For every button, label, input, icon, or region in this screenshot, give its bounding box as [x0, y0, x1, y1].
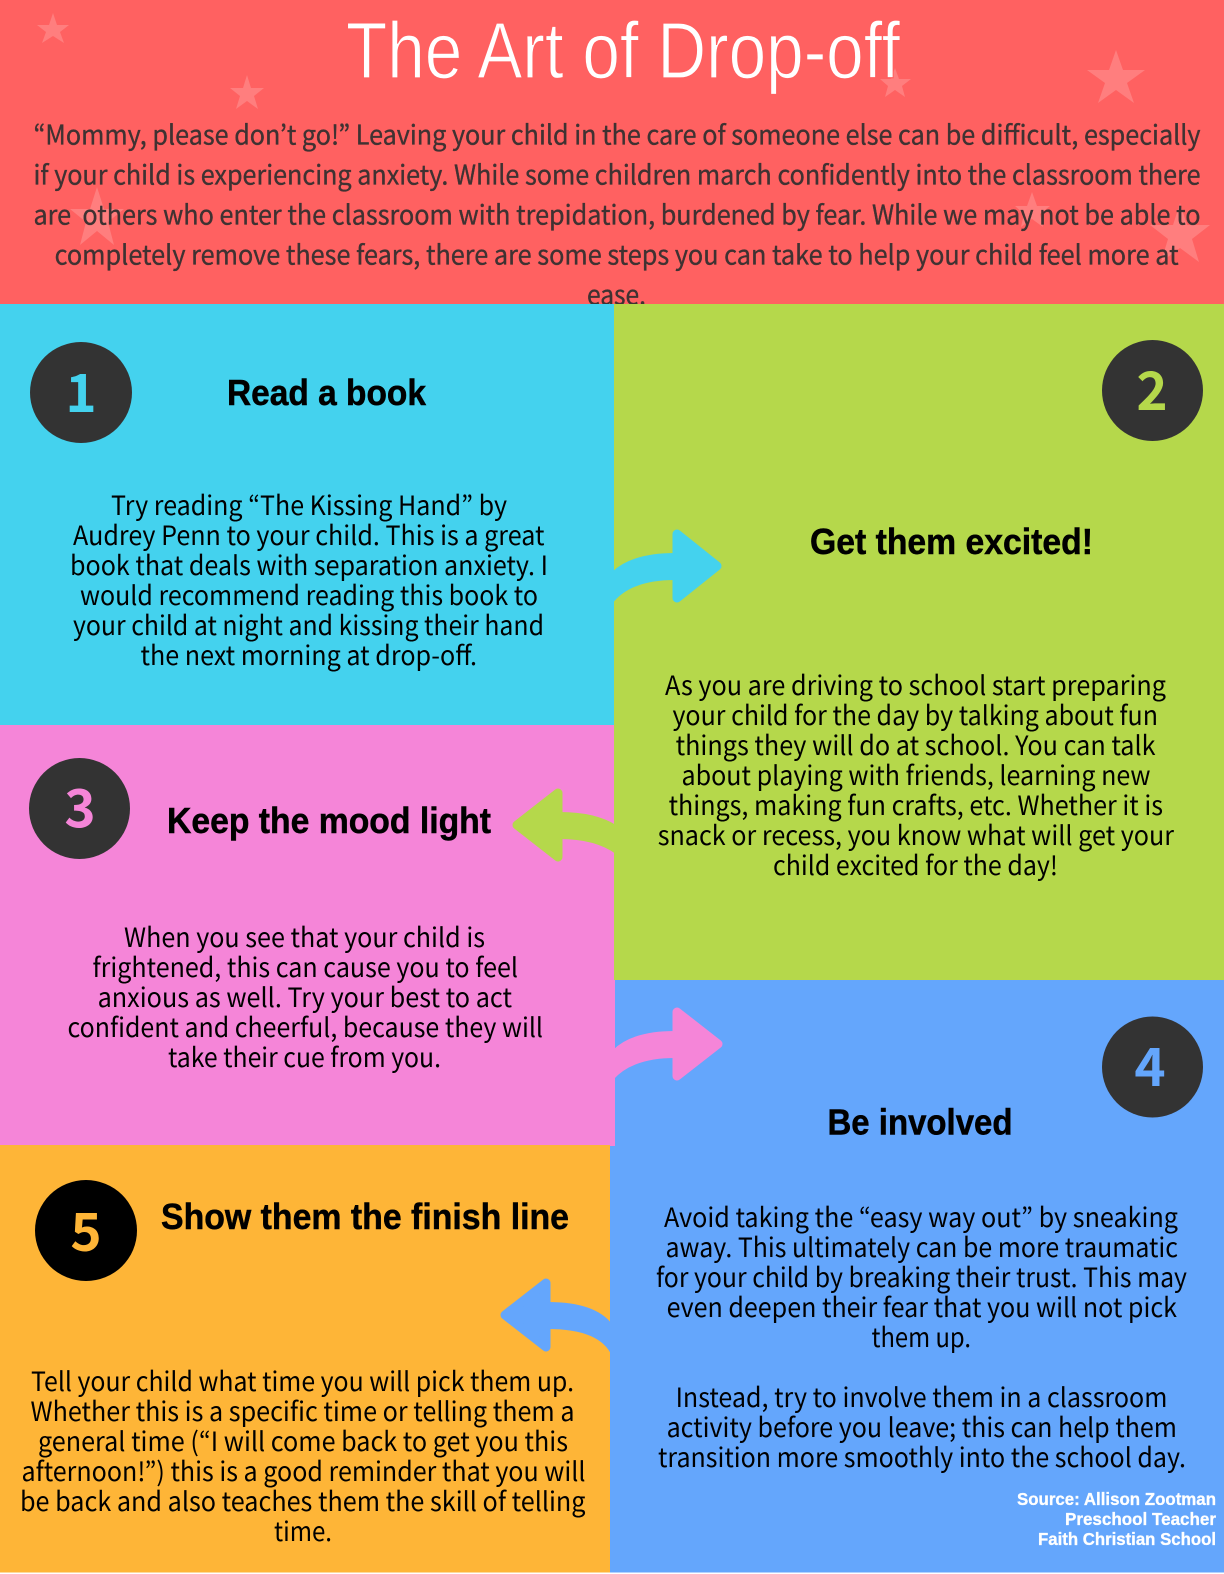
arrow: step 2 to step 3 [517, 793, 616, 857]
body 2 [658, 664, 1175, 883]
body 1: Try reading “The Kissing Hand” by [111, 484, 507, 523]
badge 5 [35, 1180, 137, 1281]
title: The Art of Drop-off [346, 6, 901, 95]
body 4: for your child by breaking their trust. This may [656, 1256, 1187, 1295]
heading 4: Be involved [828, 1102, 1012, 1142]
heading 1: Read a book [227, 372, 427, 413]
body 3: anxious as well. Try your best to act [98, 976, 512, 1015]
panel: step 3 keep the mood light [0, 725, 615, 1146]
body 1: your child at night and kissing their hand [73, 604, 544, 643]
body 2: child excited for the day! [773, 844, 1058, 883]
panel: header [0, 0, 1224, 312]
body 4: away. This ultimately can be more traumatic [666, 1226, 1178, 1265]
body 4: activity before you leave; this can help them [667, 1406, 1177, 1445]
badge 1 [30, 342, 132, 443]
body 5: be back and also teaches them the skill of telling [20, 1480, 586, 1519]
panel: step 4 be involved [610, 980, 1224, 1572]
panel: step 1 read a book [0, 304, 614, 725]
badge 2: 2 [1136, 350, 1168, 426]
body 5: Tell your child what time you will pick them up. [31, 1360, 574, 1399]
source credit [1017, 1489, 1216, 1549]
body 4: Instead, try to involve them in a classroom [676, 1376, 1167, 1415]
body 5: time. [274, 1510, 332, 1549]
body 2: things, making fun crafts, etc. Whether it is [669, 784, 1163, 823]
decorative stars [37, 13, 1210, 262]
body 1 [70, 484, 548, 673]
body 3 [68, 916, 543, 1075]
badge 1: 1 [65, 352, 97, 428]
heading 2: Get them excited! [810, 521, 1093, 562]
body 2: snack or recess, you know what will get your [658, 814, 1175, 853]
badge 5: 5 [70, 1191, 102, 1267]
body 5 [20, 1360, 586, 1549]
body 1: Audrey Penn to your child. This is a great [73, 514, 544, 553]
intro text: ease. [587, 274, 646, 312]
body 1: the next morning at drop-off. [140, 634, 477, 673]
body 2: things they will do at school. You can talk [676, 724, 1156, 763]
body 5: general time (“I will come back to get you this [38, 1420, 568, 1459]
heading 5: Show them the finish line [161, 1196, 569, 1237]
source credit: Source: Allison Zootman [1017, 1489, 1216, 1509]
intro text [34, 114, 1200, 312]
heading 3: Keep the mood light [167, 800, 491, 841]
body 4: transition more smoothly into the school day. [658, 1436, 1186, 1475]
body 3: When you see that your child is [124, 916, 485, 955]
arrow: step 4 to step 5 [505, 1283, 612, 1356]
badge 4: 4 [1134, 1026, 1166, 1102]
body 5: Whether this is a specific time or telling them a [30, 1390, 574, 1429]
body 2: your child for the day by talking about fun [672, 694, 1158, 733]
badge 3: 3 [64, 768, 96, 844]
badge 2 [1102, 340, 1203, 441]
panel: step 2 get them excited [614, 304, 1224, 980]
body 1: would recommend reading this book to [80, 574, 538, 613]
body 3: confident and cheerful, because they will [68, 1006, 543, 1045]
body 2: As you are driving to school start preparing [665, 664, 1166, 703]
badge 4 [1102, 1016, 1203, 1118]
body 3: frightened, this can cause you to feel [92, 946, 518, 985]
source credit: Faith Christian School [1038, 1529, 1216, 1549]
body 4: them up. [872, 1316, 971, 1355]
source credit: Preschool Teacher [1065, 1509, 1216, 1529]
arrow: step 1 to step 2 [612, 534, 717, 604]
body 1: book that deals with separation anxiety. I [70, 544, 548, 583]
panel: step 5 show them the finish line [0, 1145, 610, 1572]
body 4 [656, 1196, 1187, 1475]
arrow: step 3 to step 4 [613, 1012, 718, 1080]
body 4: even deepen their fear that you will not pick [667, 1286, 1177, 1325]
body 5: afternoon!”) this is a good reminder that you will [22, 1450, 586, 1489]
intro text: completely remove these fears, there are some steps you can take to help your child feel more at [55, 234, 1179, 272]
body 2: about playing with friends, learning new [682, 754, 1150, 793]
badge 3 [29, 758, 130, 859]
body 4: Avoid taking the “easy way out” by sneaking [664, 1196, 1178, 1235]
body 3: take their cue from you. [168, 1036, 441, 1075]
